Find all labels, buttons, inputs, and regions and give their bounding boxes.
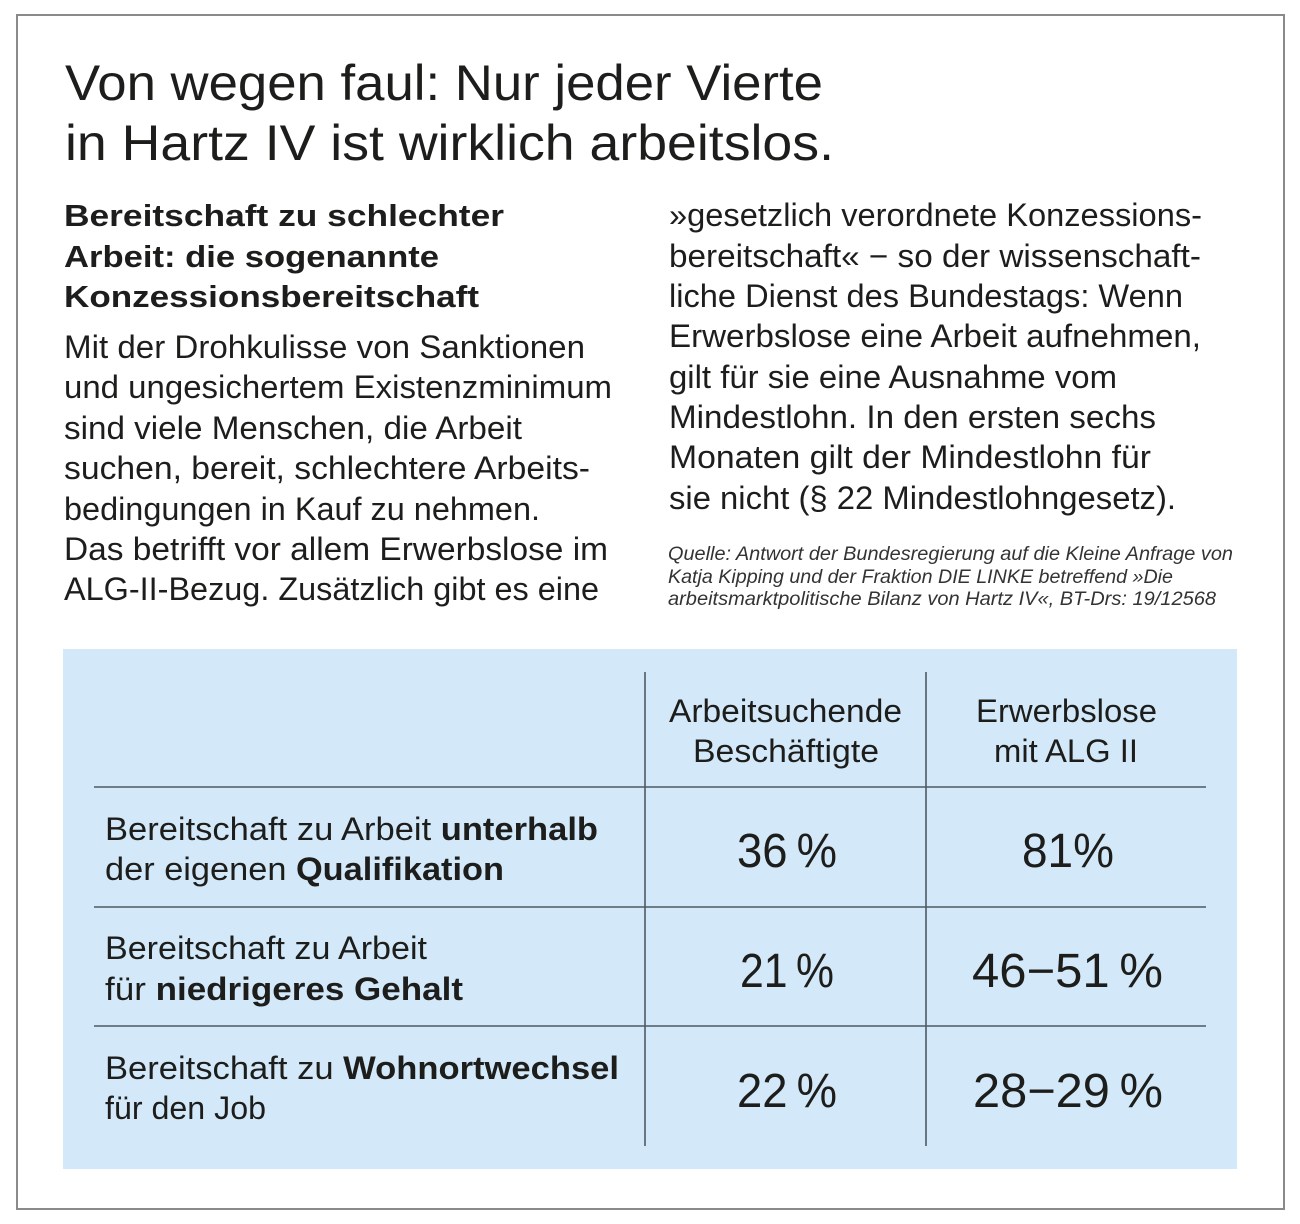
row 1 values: 36 % <box>737 825 837 878</box>
column header: Erwerbslose mit ALG II: Erwerbslose <box>976 693 1157 729</box>
body text: left column: Das betrifft vor allem Erwerbslose im <box>64 531 608 567</box>
row 1 label: der eigenen Qualifikation <box>105 851 504 887</box>
row 2 label: Bereitschaft zu Arbeit <box>105 930 427 966</box>
row 2 values: 21 % <box>740 945 834 998</box>
row 2 label <box>105 930 463 1007</box>
column header: Erwerbslose mit ALG II <box>976 693 1157 769</box>
source note: Katja Kipping und der Fraktion DIE LINKE betreffend »Die <box>668 566 1173 588</box>
column header: Arbeitsuchende Beschäftigte <box>669 693 902 769</box>
source note <box>668 543 1233 610</box>
body text: left column: ALG-II-Bezug. Zusätzlich gibt es eine <box>64 571 599 607</box>
body text: left column: bedingungen in Kauf zu nehmen. <box>64 491 540 527</box>
table grid <box>94 672 1206 1146</box>
text block: right column: Erwerbslose eine Arbeit aufnehmen, <box>669 318 1201 354</box>
subheading: Konzessionsbereitschaft <box>64 279 479 314</box>
panel: comparison table <box>63 649 1237 1169</box>
row 3 values: 22 % <box>737 1065 837 1118</box>
body text: left column <box>64 329 612 607</box>
subheading: Arbeit: die sogenannte <box>64 239 439 274</box>
row 3 label: für den Job <box>105 1090 266 1126</box>
text block: right column: gilt für sie eine Ausnahme vom <box>669 359 1117 395</box>
row 1 label <box>105 811 598 887</box>
row 1 values <box>737 825 1114 878</box>
row 3 values <box>737 1065 1163 1118</box>
text block: right column: Monaten gilt der Mindestlohn für <box>669 439 1151 475</box>
text block: right column: liche Dienst des Bundestags: Wenn <box>669 278 1183 314</box>
title <box>65 55 834 171</box>
text block: left column <box>64 198 612 607</box>
column header: Erwerbslose mit ALG II: mit ALG II <box>994 733 1138 769</box>
text block: right column: Mindestlohn. In den ersten sechs <box>669 399 1156 435</box>
body text: left column: suchen, bereit, schlechtere Arbeits- <box>64 450 590 486</box>
row 2 values: 46−51 % <box>972 945 1163 998</box>
column header: Arbeitsuchende Beschäftigte: Beschäftigte <box>693 733 879 769</box>
body text: left column: Mit der Drohkulisse von Sanktionen <box>64 329 585 365</box>
subheading: Bereitschaft zu schlechter <box>64 198 504 233</box>
row 1 values: 81% <box>1022 825 1114 878</box>
title: in Hartz IV ist wirklich arbeitslos. <box>65 115 834 171</box>
row 3 label <box>105 1050 619 1126</box>
row 1 label: Bereitschaft zu Arbeit unterhalb <box>105 811 598 847</box>
source note: Quelle: Antwort der Bundesregierung auf die Kleine Anfrage von <box>668 543 1233 565</box>
table background <box>63 649 1237 1169</box>
text block: right column <box>669 197 1202 516</box>
body text: left column: sind viele Menschen, die Arbeit <box>64 410 522 446</box>
column header: Arbeitsuchende Beschäftigte: Arbeitsuchende <box>669 693 902 729</box>
row 3 label: Bereitschaft zu Wohnortwechsel <box>105 1050 619 1086</box>
row 3 values: 28−29 % <box>973 1065 1163 1118</box>
source note: arbeitsmarktpolitische Bilanz von Hartz IV«, BT-Drs: 19/12568 <box>668 588 1216 610</box>
body text: left column: und ungesichertem Existenzminimum <box>64 369 612 405</box>
title: Von wegen faul: Nur jeder Vierte <box>65 55 823 111</box>
text block: right column: sie nicht (§ 22 Mindestlohngesetz). <box>669 480 1176 516</box>
row 2 label: für niedrigeres Gehalt <box>105 971 463 1007</box>
row 2 values <box>740 945 1163 998</box>
text block: right column: bereitschaft« − so der wissenschaft- <box>669 238 1201 274</box>
text block: right column: »gesetzlich verordnete Konzessions- <box>669 197 1202 233</box>
subheading <box>64 198 504 314</box>
